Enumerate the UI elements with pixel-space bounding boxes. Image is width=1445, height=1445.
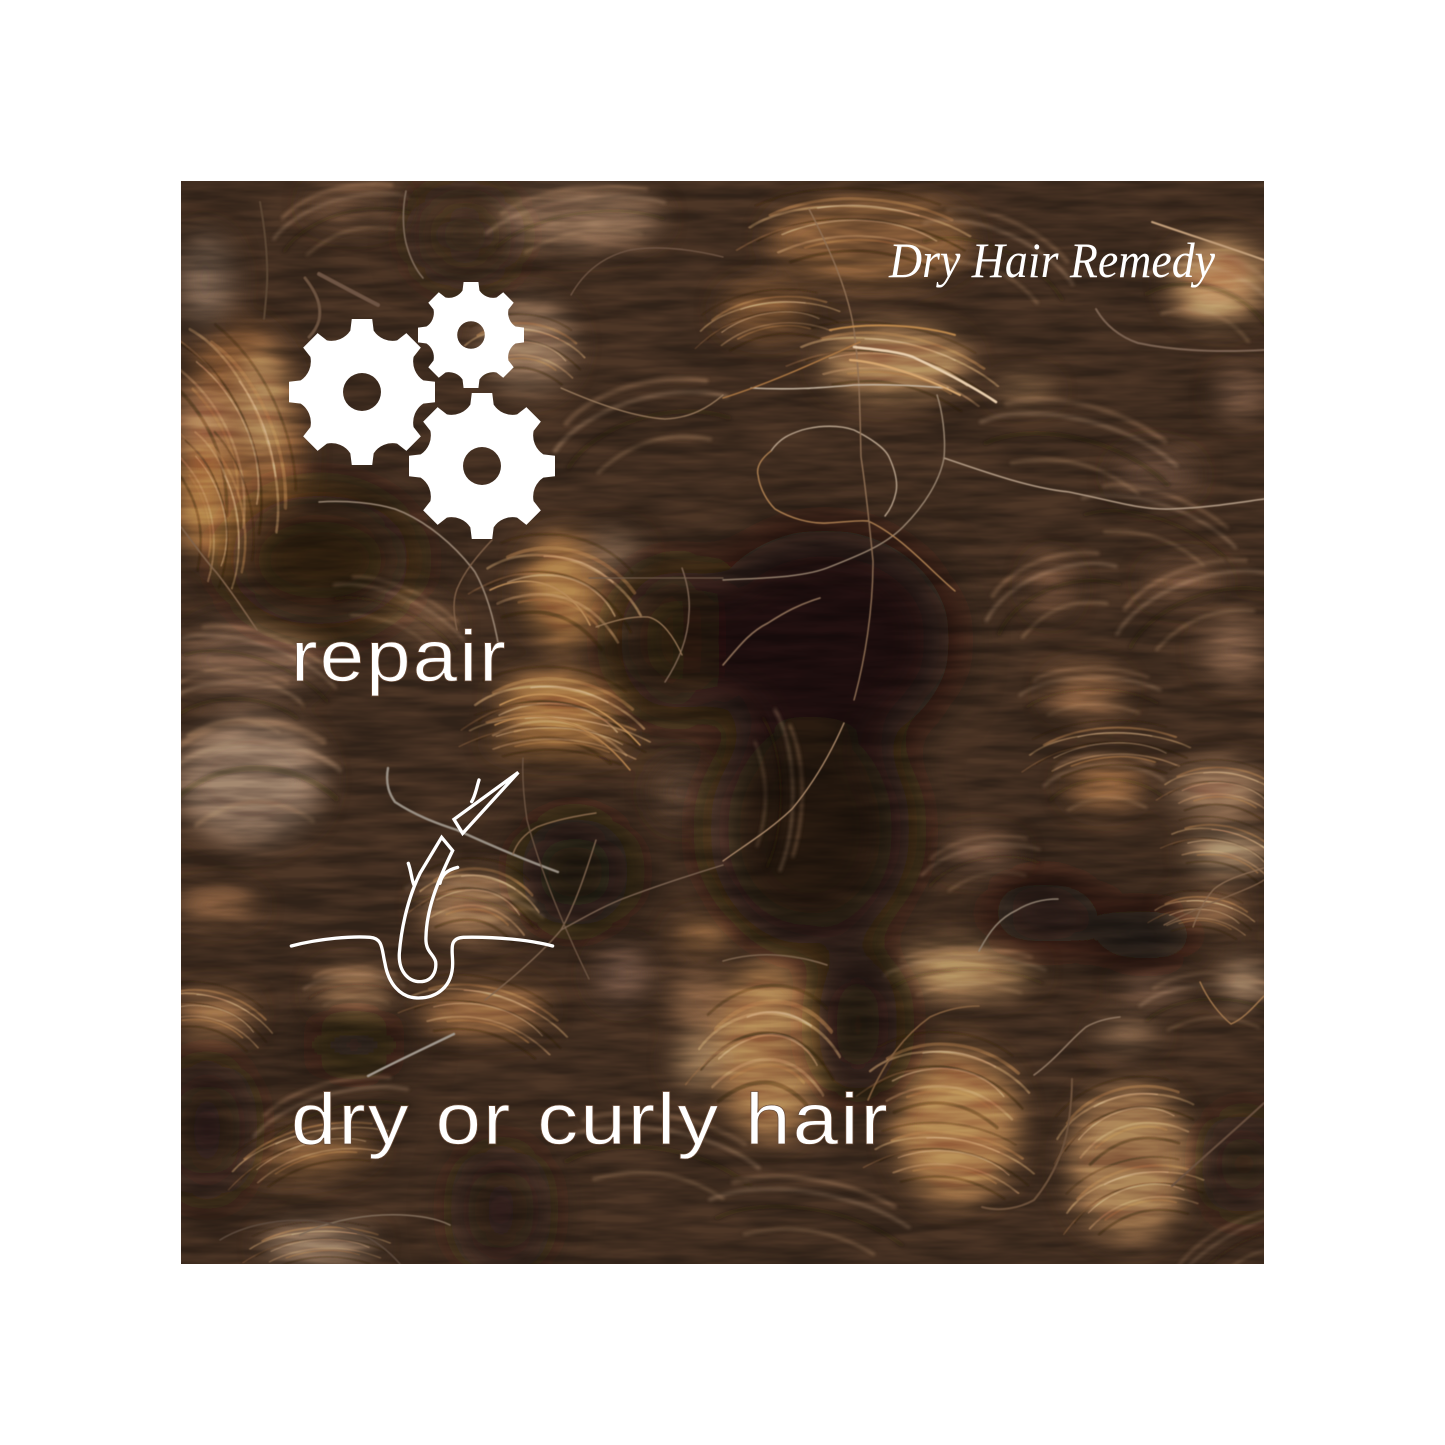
shading: soft dark hollows between curls (173, 199, 1270, 1270)
label: repair: repair (291, 617, 508, 697)
icon: hair follicle (291, 772, 553, 998)
title: Dry Hair Remedy: Dry Hair Remedy (888, 232, 1216, 288)
icon: small top gear (418, 282, 524, 388)
texture: fine fibre overlay (181, 181, 1264, 1264)
panel: curly hair photo background (181, 181, 1264, 1264)
icon: lower right gear (409, 393, 555, 539)
label: dry or curly hair: dry or curly hair (291, 1080, 890, 1160)
infographic canvas (181, 181, 1264, 1264)
icon: three gears (289, 282, 555, 539)
strands: fine flyaway hairs (181, 191, 1264, 1264)
texture: sharp curl highlights (144, 178, 1297, 1267)
texture: soft curl bundles (160, 171, 1303, 1307)
icon: large left gear (289, 319, 435, 465)
